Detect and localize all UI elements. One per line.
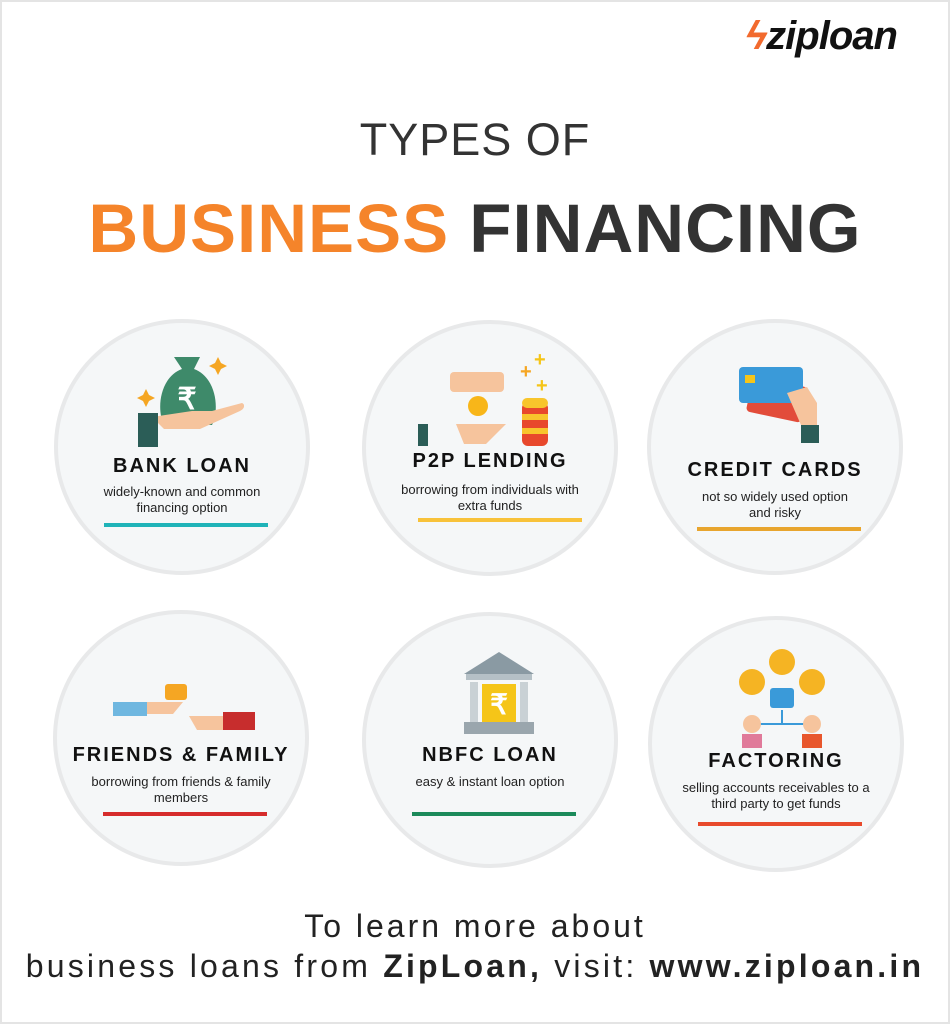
logo: ϟziploan (746, 14, 897, 58)
panel: bank loan (54, 319, 310, 575)
icon: hands and coins (418, 349, 548, 446)
footer text (26, 908, 924, 984)
icon: bank: ₹ (490, 689, 508, 720)
title: BUSINESS FINANCING (88, 190, 862, 267)
heading: BANK LOAN (113, 455, 251, 477)
text: widely-known and common financing option (104, 484, 260, 515)
footer text: To learn more about (304, 908, 646, 944)
icon: hands and coins: + (520, 361, 532, 383)
panel: credit cards (647, 319, 903, 575)
icon: factoring (739, 649, 825, 748)
heading: FACTORING (708, 750, 844, 772)
footer text: business loans from ZipLoan, visit: www.ziploan.in (26, 948, 924, 984)
panel: friends & family (53, 610, 309, 866)
panel: p2p lending (362, 320, 618, 576)
text: not so widely used option and risky (702, 489, 848, 520)
text: easy & instant loan option (416, 774, 564, 789)
icon: cards (739, 367, 819, 443)
heading: P2P LENDING (412, 450, 568, 472)
panel: factoring (648, 616, 904, 872)
icon: bank (464, 652, 534, 734)
icon: handing coins (113, 684, 255, 730)
title: TYPES OF (360, 114, 590, 165)
heading: FRIENDS & FAMILY (73, 744, 289, 766)
icon: hands and coins: + (534, 349, 546, 371)
icon: money bag: ₹ (177, 383, 197, 416)
icon: money bag (137, 357, 244, 447)
text: selling accounts receivables to a third party to get funds (682, 780, 870, 811)
text: borrowing from friends & family members (91, 774, 271, 805)
heading: CREDIT CARDS (687, 459, 863, 481)
text: borrowing from individuals with extra funds (401, 482, 579, 513)
heading: NBFC LOAN (422, 744, 558, 766)
icon: hands and coins: + (536, 375, 548, 397)
panel: nbfc loan (362, 612, 618, 868)
title (88, 114, 862, 267)
